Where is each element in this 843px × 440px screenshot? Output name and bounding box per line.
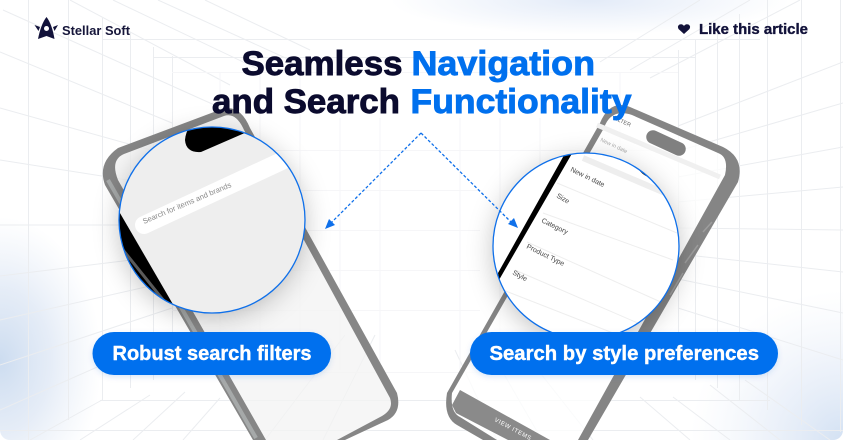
title: [212, 45, 632, 121]
left phone: [103, 108, 398, 440]
phone screen: [115, 115, 391, 440]
like this article: Like this article: [699, 22, 808, 38]
icon: rocket star: [34, 17, 58, 39]
title: Seamless: [242, 45, 402, 83]
logo: [34, 17, 131, 39]
label pill: search by style preferences: [470, 332, 778, 375]
magnifier: filter list: Style: [511, 270, 528, 283]
magnifier: filter list: Product Type: [525, 244, 565, 268]
right phone: [446, 105, 740, 440]
magnifier: search bar: [106, 119, 318, 331]
frame highlight: [108, 180, 256, 438]
dashed arrows: [325, 133, 518, 229]
label pill: robust search filters: Robust search filters: [112, 343, 312, 365]
label pill: search by style preferences: Search by style preferences: [490, 343, 759, 365]
phone screen: [452, 113, 726, 440]
phone frame: [103, 108, 398, 440]
icon: heart: [678, 24, 690, 34]
right phone screen: filter header: FILTER: [612, 115, 632, 129]
magnifier: filter list: New in date: [569, 167, 606, 189]
title: and Search: [212, 83, 400, 121]
notch: [185, 128, 244, 152]
title: Functionality: [410, 83, 632, 121]
logo: Stellar Soft: [62, 23, 131, 38]
magnifier: filter list: Category: [540, 218, 569, 236]
label pill: robust search filters: [92, 332, 331, 375]
dynamic island: [653, 137, 679, 149]
side buttons: [670, 222, 712, 295]
view items button: [452, 390, 550, 440]
magnifier: search bar: Search for items and brands: [141, 180, 233, 226]
right phone screen: filter header: [597, 115, 720, 177]
title: Navigation: [412, 45, 595, 83]
magnifier: filter list: Size: [555, 193, 570, 206]
magnifier: filter list: [493, 150, 679, 339]
phone frame: [446, 105, 740, 440]
right phone screen: filter header: New in date: [599, 137, 628, 155]
